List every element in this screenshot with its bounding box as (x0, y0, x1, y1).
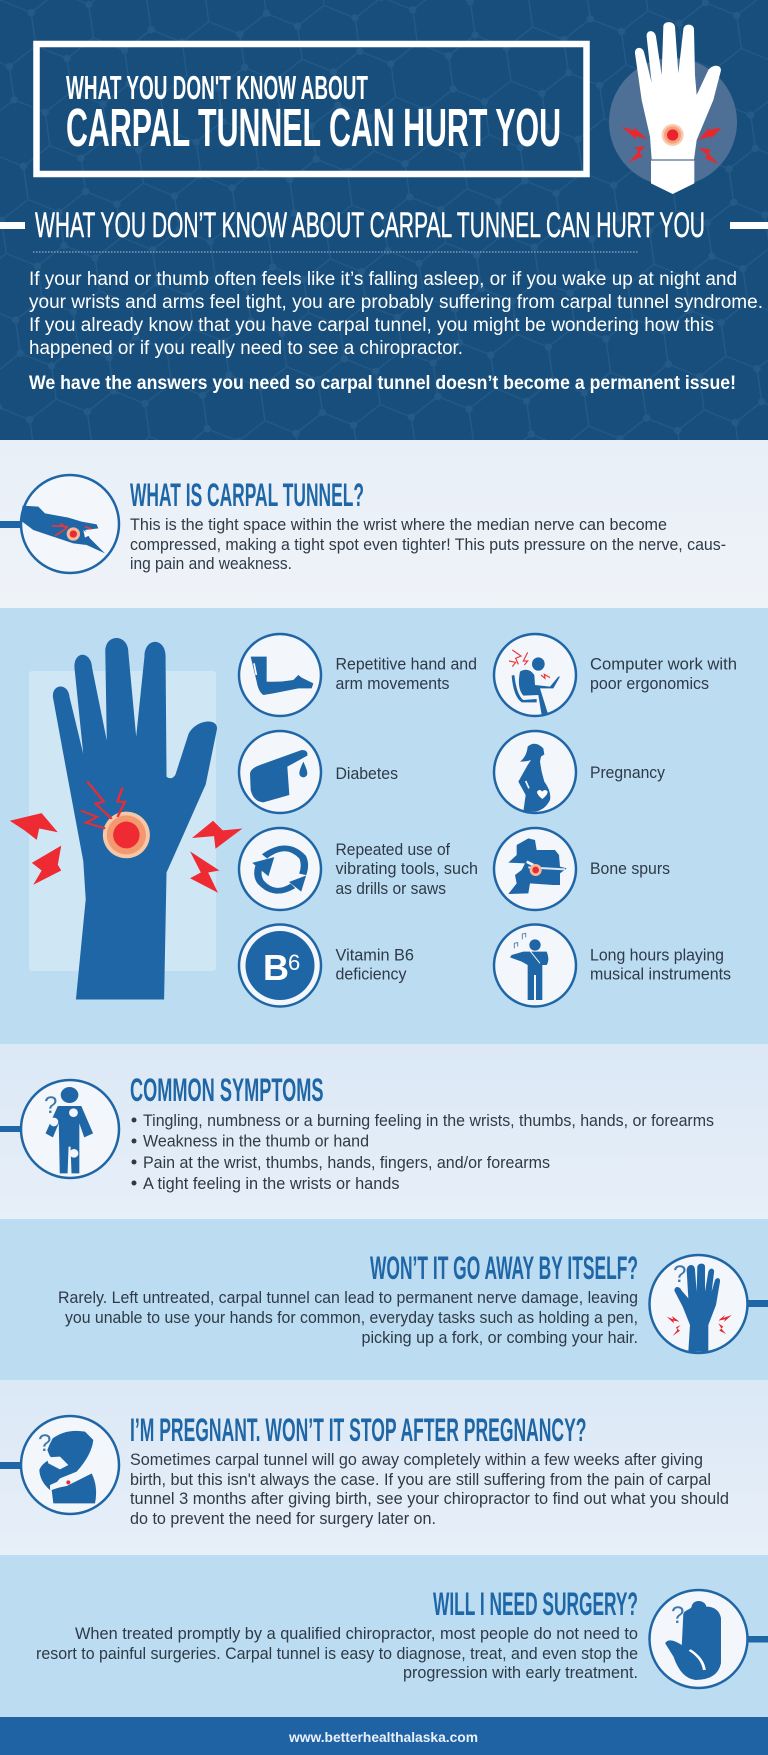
symptoms list: Tingling, numbness or a burning feeling in the wrists, thumbs, hands, or forearms (143, 1111, 714, 1130)
body text: resort to painful surgeries. Carpal tunnel is easy to diagnose, treat, and even stop the (36, 1644, 638, 1663)
panel: surgery (0, 1555, 768, 1717)
symptoms list (132, 1111, 714, 1193)
cause: repetitive movements (239, 634, 477, 716)
icon: hand with question: ? (673, 1261, 686, 1288)
body text: birth, but this isn't always the case. If you are still suffering from the pain of carpal (130, 1470, 711, 1489)
body text (130, 1450, 729, 1528)
body text: compressed, making a tight spot even tighter! This puts pressure on the nerve, caus- (130, 535, 726, 554)
icon: person with joints (21, 1080, 119, 1178)
body text (130, 515, 726, 573)
intro text: If your hand or thumb often feels like it’s falling asleep, or if you wake up at night and (29, 269, 737, 290)
body text: progression with early treatment. (403, 1663, 638, 1682)
footer (0, 1717, 768, 1755)
symptoms list: Pain at the wrist, thumbs, hands, fingers, and/or forearms (143, 1153, 550, 1172)
cause: computer work: poor ergonomics (590, 674, 709, 693)
cause: vibrating tools: Repeated use of (336, 840, 450, 859)
icon: hand with question (650, 1255, 748, 1353)
cause: vibrating tools: as drills or saws (336, 879, 446, 898)
footer: www.betterhealthalaska.com (288, 1729, 478, 1745)
heading: WHAT IS CARPAL TUNNEL? (130, 477, 364, 513)
intro text: We have the answers you need so carpal tunnel doesn’t become a permanent issue! (29, 373, 736, 394)
symptoms list: Weakness in the thumb or hand (143, 1132, 369, 1150)
icon: pregnant torso: ? (38, 1430, 51, 1457)
cause: musical instruments (494, 924, 731, 1006)
cause: vitamin b6: B (263, 947, 289, 988)
body text: picking up a fork, or combing your hair. (362, 1328, 638, 1347)
body text (36, 1624, 638, 1682)
cause: vibrating tools (239, 828, 478, 910)
title box: WHAT YOU DON'T KNOW ABOUT (66, 69, 368, 106)
cause: vitamin b6: 6 (288, 950, 300, 975)
body text: This is the tight space within the wrist where the median nerve can become (130, 515, 667, 534)
icon: pregnant torso (21, 1416, 119, 1514)
cause: diabetes (239, 731, 398, 813)
title box (36, 44, 586, 174)
cause: repetitive movements: arm movements (336, 674, 450, 693)
body text: tunnel 3 months after giving birth, see your chiropractor to find out what you should (130, 1489, 729, 1508)
body text: you unable to use your hands for common, everyday tasks such as holding a pen, (65, 1308, 638, 1327)
icon: person with joints: ? (44, 1092, 57, 1119)
panel: causes (0, 608, 768, 1044)
cause: pregnancy (494, 731, 665, 813)
intro text: If you already know that you have carpal tunnel, you might be wondering how this (29, 315, 714, 336)
cause: repetitive movements: Repetitive hand and (336, 654, 477, 674)
body text: Rarely. Left untreated, carpal tunnel can lead to permanent nerve damage, leaving (58, 1288, 638, 1307)
cause: vibrating tools: vibrating tools, such (336, 859, 478, 878)
body text: Sometimes carpal tunnel will go away completely within a few weeks after giving (130, 1450, 703, 1469)
intro text (29, 269, 763, 394)
heading: COMMON SYMPTOMS (130, 1072, 324, 1108)
icon: closed hand (650, 1590, 748, 1688)
body text: do to prevent the need for surgery later on. (130, 1509, 436, 1528)
icon: big hand (10, 638, 242, 1000)
body text: ing pain and weakness. (130, 554, 292, 573)
intro text: your wrists and arms feel tight, you are probably suffering from carpal tunnel syndrome. (29, 292, 763, 313)
body text: When treated promptly by a qualified chiropractor, most people do not need to (75, 1624, 638, 1643)
icon: closed hand: ? (671, 1602, 684, 1629)
cause: diabetes: Diabetes (336, 764, 398, 783)
cause: bone spurs: Bone spurs (590, 859, 670, 878)
cause: vitamin b6: deficiency (336, 964, 407, 984)
icon: wrist (20, 475, 119, 573)
panel: pregnancy (0, 1380, 768, 1555)
icon: white hand in circle (609, 22, 737, 194)
cause: musical instruments: musical instruments (590, 964, 731, 984)
cause: musical instruments: Long hours playing (590, 946, 724, 964)
panel: what is carpal tunnel (0, 440, 768, 608)
intro text: happened or if you really need to see a chiropractor. (29, 338, 463, 359)
cause: vitamin b6 (239, 924, 414, 1006)
cause: bone spurs (494, 828, 670, 910)
body text (58, 1288, 638, 1347)
panel: header (0, 0, 768, 440)
cause: computer work (494, 634, 737, 716)
cause: computer work: Computer work with (590, 654, 737, 674)
panel: won't it go away (0, 1219, 768, 1380)
cause: vitamin b6: Vitamin B6 (336, 946, 414, 964)
cause: pregnancy: Pregnancy (590, 763, 665, 782)
panel: common symptoms (0, 1044, 768, 1219)
symptoms list: A tight feeling in the wrists or hands (143, 1174, 400, 1193)
